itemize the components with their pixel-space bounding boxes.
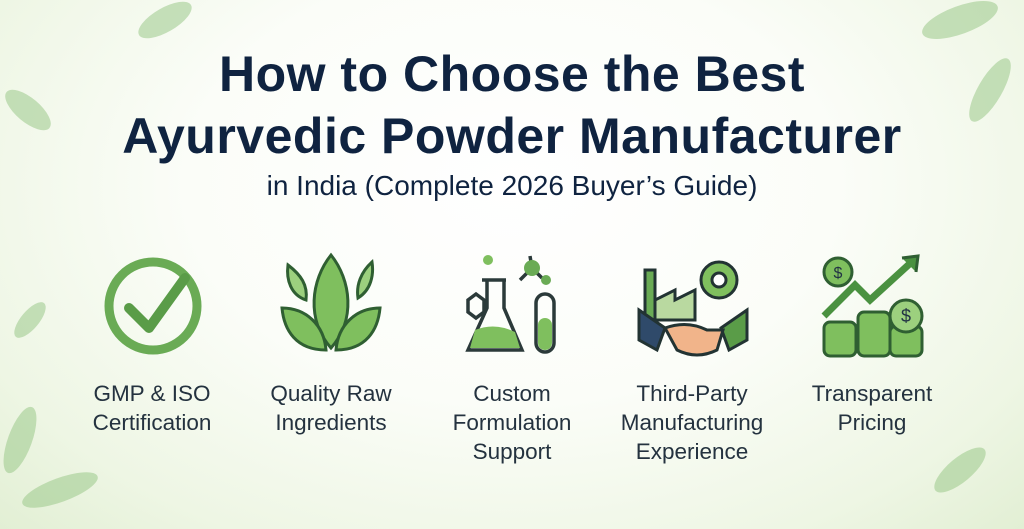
title: How to Choose the Best [219,46,805,102]
label: transparent pricing: Transparent [812,381,932,406]
icon: certification check [104,258,870,354]
label: transparent pricing: Pricing [838,410,906,435]
label: custom formulation: Support [473,439,551,464]
label: quality raw ingredients: Quality Raw [270,381,392,406]
icon: pricing coins [822,254,924,358]
label: custom formulation: Custom [473,381,551,406]
label: GMP & ISO: GMP & ISO [93,381,211,406]
label: quality raw ingredients: Ingredients [275,410,387,435]
label: third-party [621,381,763,464]
icon: pricing coins: $ [834,265,843,282]
label: third-party: Third-Party [636,381,748,406]
title [122,46,902,164]
icon: factory handshake [638,260,748,356]
title: Ayurvedic Powder Manufacturer [122,108,902,164]
icon: pricing coins: $ [901,306,911,326]
label: custom formulation [453,381,571,464]
label: GMP & ISO: Certification [93,410,211,435]
label: GMP & ISO [93,381,211,435]
label: third-party: Manufacturing [621,410,763,435]
icon: lab flask [465,255,556,354]
label: quality raw ingredients [270,381,392,435]
icon: leaves [280,252,382,352]
label: transparent pricing [812,381,932,435]
subtitle: in India (Complete 2026 Buyer’s Guide) [267,170,757,201]
label: custom formulation: Formulation [453,410,571,435]
label: third-party: Experience [636,439,748,464]
